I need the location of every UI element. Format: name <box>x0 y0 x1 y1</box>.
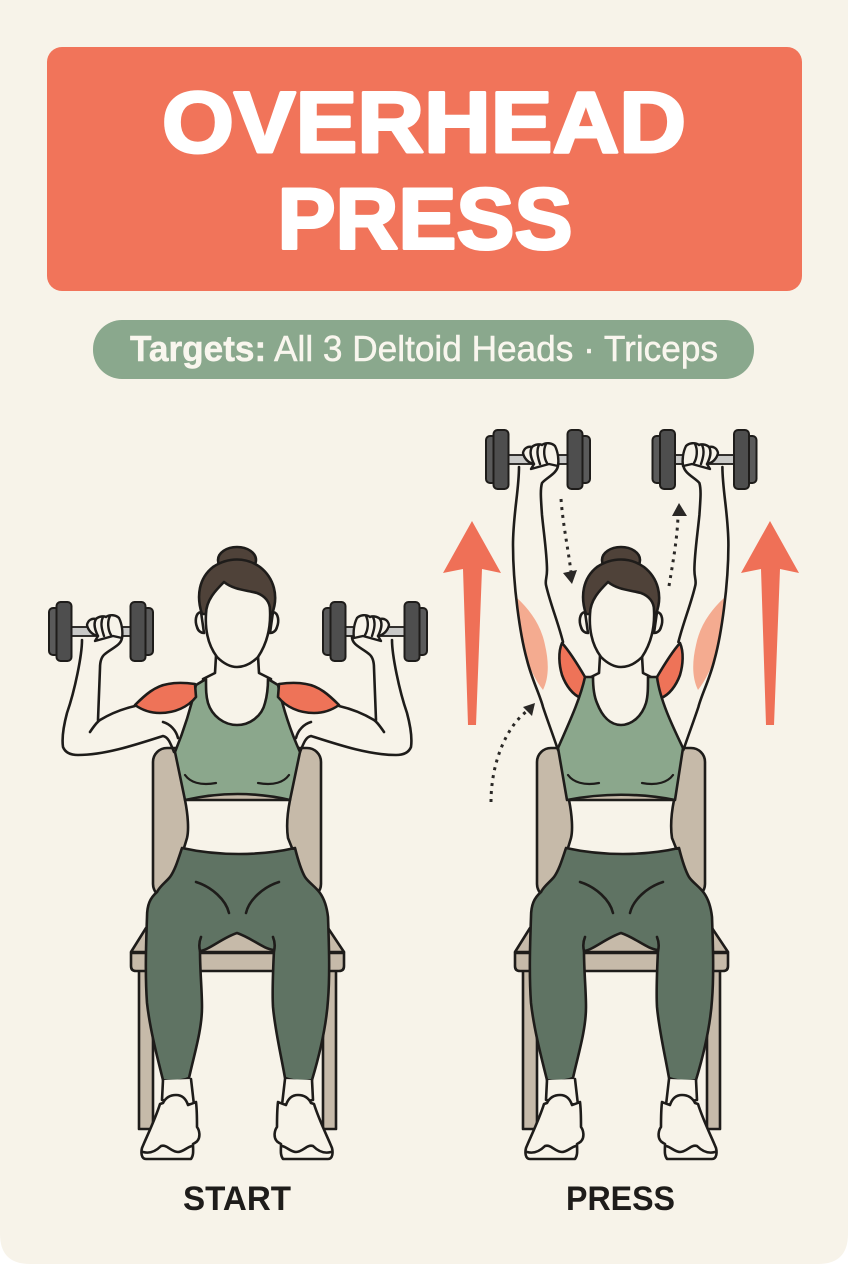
right arm <box>678 465 728 750</box>
dotted arrow down <box>561 499 577 584</box>
big arrow right <box>741 521 799 725</box>
deltoid highlights <box>559 643 683 698</box>
tank top <box>175 679 300 800</box>
dotted curved arrow <box>491 703 535 802</box>
deltoid highlights <box>135 683 339 713</box>
targets pill: Targets: All 3 Deltoid Heads · Triceps <box>130 328 718 369</box>
chair and legs <box>131 848 344 1159</box>
left arm <box>63 637 178 755</box>
dotted arrow up <box>669 503 687 586</box>
title banner: OVERHEAD <box>162 75 686 171</box>
label: press: PRESS <box>566 1180 675 1218</box>
head <box>580 547 662 679</box>
right hand <box>683 443 718 469</box>
left hand <box>523 443 558 469</box>
dumbbell left <box>486 430 590 489</box>
left arm <box>513 465 563 750</box>
figure: press position <box>486 430 756 1159</box>
tank top <box>558 677 683 800</box>
right arm <box>296 637 411 755</box>
dumbbell left <box>49 602 153 661</box>
targets pill <box>93 320 754 379</box>
triceps highlights <box>517 598 724 690</box>
figure: start position <box>49 547 427 1159</box>
dumbbell right <box>323 602 427 661</box>
left hand <box>87 615 122 641</box>
title banner: PRESS <box>278 172 572 268</box>
chair and legs <box>515 848 728 1159</box>
right hand <box>354 615 389 641</box>
head <box>196 547 278 679</box>
label: start: START <box>183 1180 291 1218</box>
big arrow left <box>443 521 501 725</box>
dumbbell right <box>652 430 756 489</box>
title banner <box>47 47 802 291</box>
